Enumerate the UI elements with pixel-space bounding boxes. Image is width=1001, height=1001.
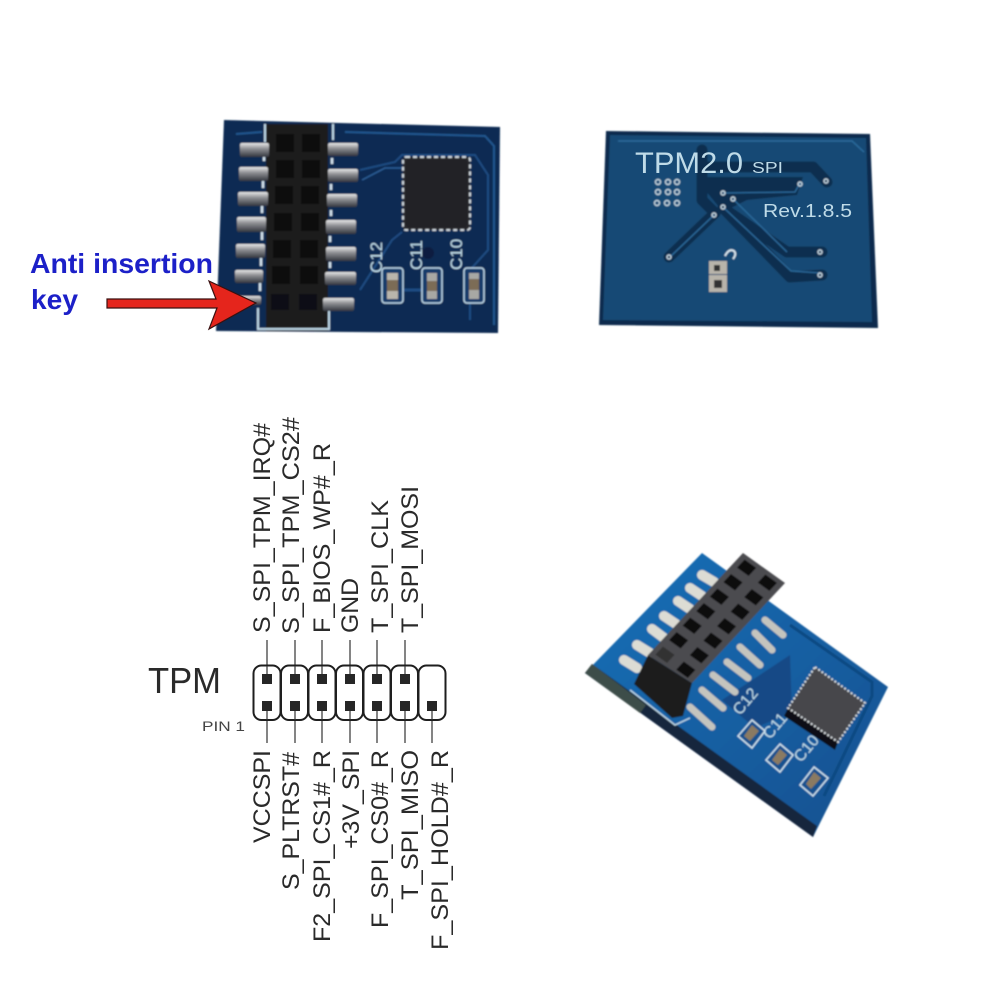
silkscreen: SPI: SPI <box>752 160 783 177</box>
capacitor silkscreen labels: C10 <box>447 239 466 270</box>
callout: Anti insertion key <box>30 248 213 315</box>
bottom pin labels: F_SPI_CS0#_R <box>367 750 394 928</box>
top pin labels: F_BIOS_WP#_R <box>309 443 336 633</box>
solder pins left <box>235 143 269 305</box>
bottom pin labels: +3V_SPI <box>338 750 365 849</box>
right row pins <box>690 620 783 727</box>
silkscreen labels: C11 <box>760 710 791 743</box>
pinout title: TPM: TPM <box>148 660 221 701</box>
solder pads <box>709 261 727 274</box>
photo: TPM module front <box>216 120 500 333</box>
photo: TPM module back <box>599 131 878 328</box>
bottom pin labels: VCCSPI <box>249 750 276 843</box>
left row pins <box>624 575 714 668</box>
QFN chip <box>403 157 470 230</box>
capacitors <box>382 268 484 303</box>
bottom pin labels: T_SPI_MISO <box>397 750 424 900</box>
capacitor silkscreen labels: C11 <box>407 240 426 270</box>
bottom pin labels <box>249 750 454 950</box>
capacitor silkscreen labels <box>367 239 466 273</box>
pin header diagram <box>254 640 446 743</box>
bottom pin labels: F2_SPI_CS1#_R <box>309 750 336 942</box>
callout: Anti insertion key: Anti insertion <box>30 248 213 279</box>
socket top and side <box>634 553 785 718</box>
top pin labels: S_SPI_TPM_CS2# <box>278 416 305 634</box>
pin 1 label: PIN 1 <box>202 718 245 734</box>
via grid <box>654 179 828 277</box>
capacitor silkscreen labels: C12 <box>367 242 386 273</box>
top pin labels: GND <box>337 578 364 633</box>
silkscreen labels: C12 <box>730 685 762 719</box>
silkscreen: revision: Rev.1.8.5 <box>763 201 852 221</box>
socket silkscreen outline <box>258 124 333 329</box>
silkscreen labels: C10 <box>791 732 823 766</box>
copper traces <box>669 150 827 277</box>
photo: assembled module perspective <box>585 553 888 837</box>
bottom pin labels: F_SPI_HOLD#_R <box>427 750 454 950</box>
top pin labels: S_SPI_TPM_IRQ# <box>249 422 276 633</box>
top pin labels: T_SPI_MOSI <box>397 486 424 633</box>
top pin labels: T_SPI_CLK <box>367 500 394 633</box>
callout: Anti insertion key: key <box>31 284 78 315</box>
arrow: red pointer to key <box>107 281 256 329</box>
silkscreen labels <box>730 685 823 766</box>
top pin labels <box>249 416 424 634</box>
header socket <box>266 124 328 331</box>
capacitors <box>738 720 828 796</box>
solder pins right <box>323 143 358 311</box>
QFN chip <box>784 667 865 750</box>
silkscreen: TPM2.0: TPM2.0 <box>635 147 743 180</box>
bottom pin labels: S_PLTRST# <box>278 751 305 890</box>
